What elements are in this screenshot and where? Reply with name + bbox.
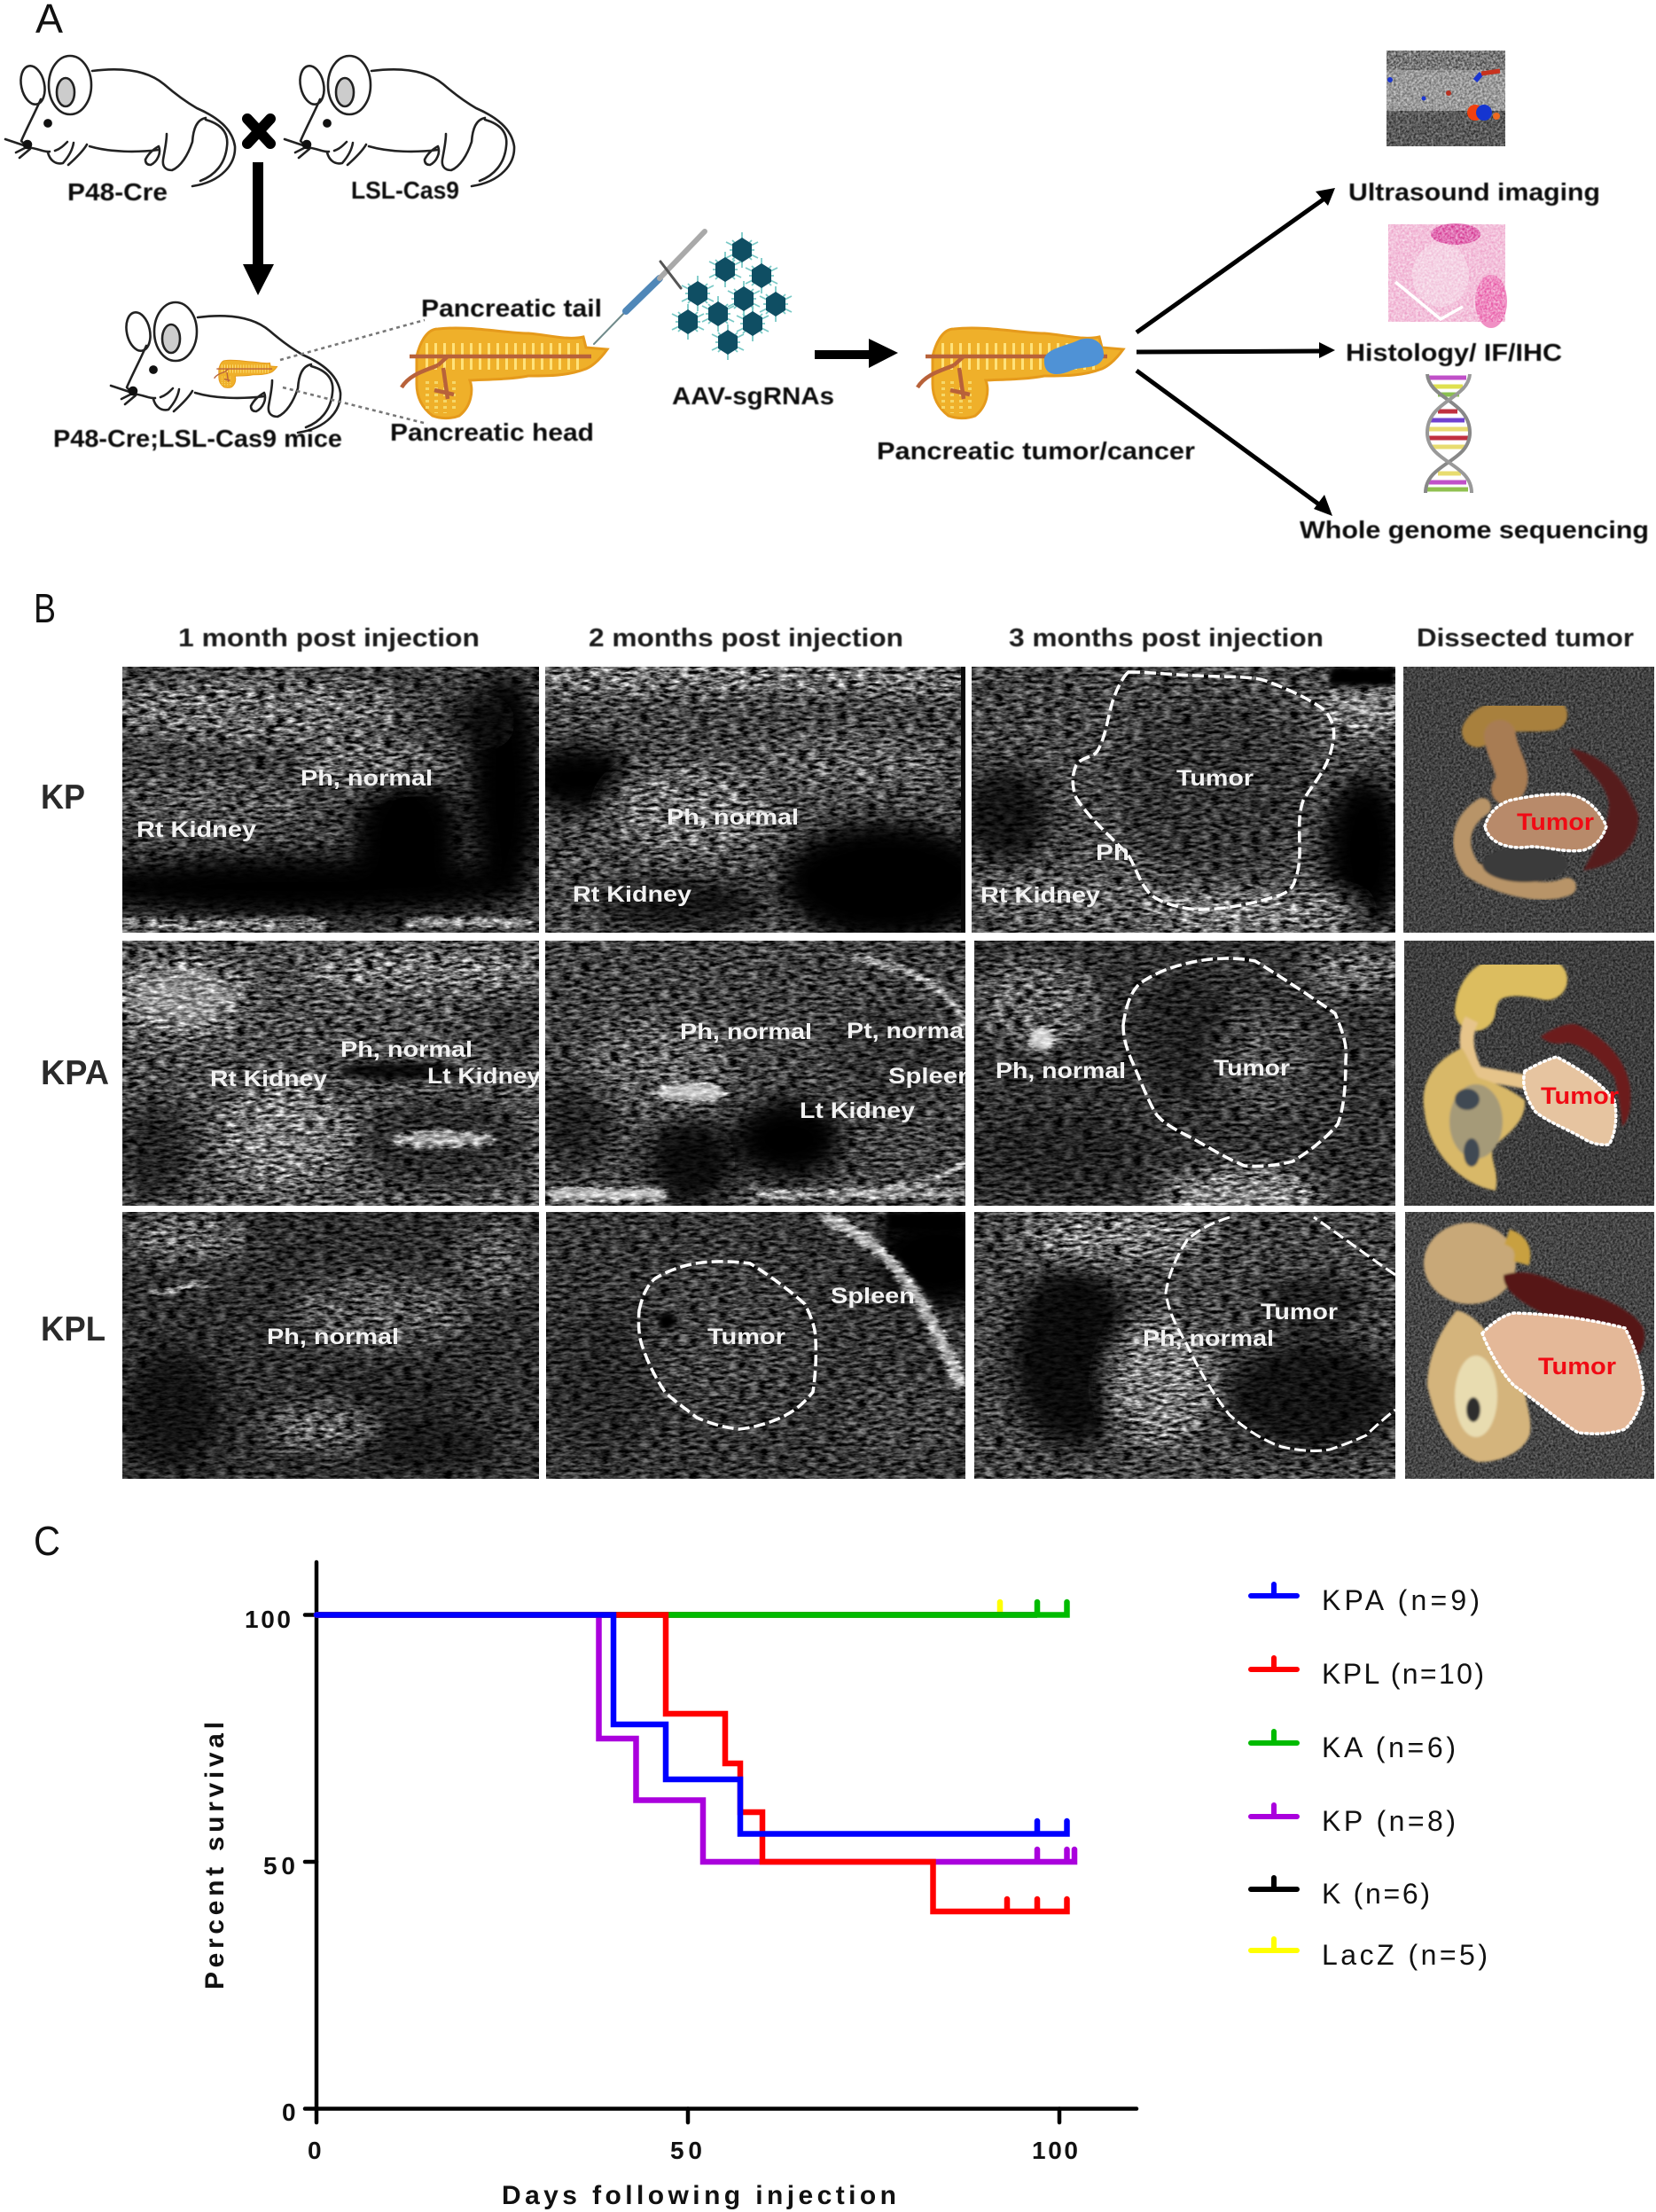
icon: P48-Cre mouse [5,56,235,186]
survival curve: K [316,1612,1037,1618]
legend item: KPA: KPA (n=9) [1322,1584,1480,1616]
icon: syringe [594,231,705,344]
ultrasound: KPA 2 months: Ph, normal [680,1020,812,1044]
heading: panel letter C: C [34,1518,60,1564]
ultrasound: KPA 1 month: Rt Kidney [210,1067,327,1091]
panel C: survival chart [34,1518,1488,2210]
tumor outline [1073,672,1334,910]
ultrasound: KPA 3 months with tumor outline: Ph, normal [996,1059,1126,1083]
dissected tumor outline [1485,794,1606,851]
ultrasound: KPA 3 months with tumor outline: Tumor [1214,1056,1290,1081]
legend item: K [1251,1878,1430,1910]
ultrasound: KPA 1 month: Lt Kidney [427,1064,541,1089]
icon: AAV particles [672,232,792,360]
column heading 3: 3 months post injection [1009,624,1324,653]
ultrasound: KPA 3 months with tumor outline [974,941,1410,1223]
survival curve: KP [316,1615,1074,1862]
survival curve: KA [316,1602,1067,1615]
ultrasound: KP 2 months [545,667,965,933]
ultrasound: KPL 3 months with tumor outline [974,1212,1401,1479]
heading: panel letter B: B [34,585,56,631]
survival curve: KPL [316,1615,1067,1911]
arrow: AAV to tumor [815,339,898,368]
ultrasound: KPL 2 months with tumor outline: Spleen [831,1284,915,1309]
x-axis title: Days following injection [502,2181,896,2210]
label: whole genome sequencing: Whole genome sequencing [1300,516,1649,543]
label: pancreatic tumor/cancer: Pancreatic tumor/cancer [877,437,1195,465]
ultrasound: KPA 2 months: Pt, normal [847,1019,971,1043]
photo: KPA dissected tumor: Tumor [1541,1083,1620,1109]
photo: KP dissected tumor [1403,667,1654,933]
ultrasound: KPA 1 month [115,941,559,1206]
icon: cross symbol [247,119,270,144]
ultrasound: KPA 2 months: Lt Kidney [800,1098,915,1123]
image: ultrasound doppler thumbnail [1387,51,1505,146]
y-axis tick labels: 50 [263,1852,295,1880]
legend item: KP [1251,1805,1456,1837]
arrow: cross to offspring [243,162,274,295]
x-axis tick labels: 0 [308,2137,322,2164]
column heading 4: Dissected tumor [1417,624,1634,653]
y-axis title: Percent survival [200,1722,230,1989]
icon: DNA helix [1426,374,1472,493]
label: AAV-sgRNAs: AAV-sgRNAs [672,382,834,410]
legend item: LacZ: LacZ (n=5) [1322,1939,1488,1971]
x-axis tick labels: 100 [1032,2137,1078,2164]
ultrasound: KPL 2 months with tumor outline [546,1210,1006,1479]
icon: pancreas with tumor [918,328,1123,418]
ultrasound: KPL 1 month [122,1212,539,1479]
ultrasound: KP 1 month [122,667,539,933]
dissected tumor outline [1482,1313,1644,1434]
legend item: KP: KP (n=8) [1322,1805,1456,1837]
icon: offspring mouse with pancreas [111,302,340,433]
panel A: experimental schematic [5,0,1649,543]
ultrasound: KPL 3 months with tumor outline: Tumor [1261,1300,1338,1325]
ultrasound: KPA 2 months [541,941,973,1206]
ultrasound: KPL 3 months with tumor outline: Ph, normal [1143,1326,1274,1351]
label: P48-Cre: P48-Cre [67,178,168,206]
x-axis tick labels [308,2137,1078,2164]
row label KPA: KPA [41,1054,109,1092]
ultrasound: KP 3 months with tumor outline: Ph [1096,840,1129,865]
legend item: KPL [1251,1658,1484,1690]
ultrasound: KP 2 months: Ph, normal [667,805,799,830]
photo: KPL dissected tumor [1405,1212,1654,1479]
label: pancreatic head: Pancreatic head [390,418,594,446]
legend item: K: K (n=6) [1322,1878,1430,1910]
ultrasound: KPL 1 month: Ph, normal [267,1325,399,1349]
row label KP: KP [41,778,85,817]
survival curve: LacZ [316,1602,1000,1615]
image: histology thumbnail [1388,223,1507,328]
legend [1251,1584,1488,1971]
arrow: to histology [1137,342,1335,358]
ultrasound: KP 3 months with tumor outline: Rt Kidney [980,883,1100,908]
label: LSL-Cas9: LSL-Cas9 [351,176,459,204]
ultrasound: KP 3 months with tumor outline [962,667,1410,933]
row label KPL: KPL [41,1310,105,1348]
photo: KPL dissected tumor: Tumor [1538,1353,1617,1380]
ultrasound: KP 1 month: Rt Kidney [137,817,256,842]
y-axis tick labels: 0 [282,2099,296,2126]
arrow: to sequencing [1137,371,1332,516]
legend item: KPA [1251,1584,1480,1616]
ultrasound: KPL 2 months with tumor outline: Tumor [707,1325,785,1349]
label: histology: Histology/ IF/IHC [1346,339,1562,366]
axes [305,1562,1137,2122]
label: ultrasound imaging: Ultrasound imaging [1348,178,1600,206]
ultrasound: KPA 2 months: Spleen [888,1064,973,1089]
photo: KPA dissected tumor [1404,941,1654,1206]
label: pancreatic tail: Pancreatic tail [421,294,602,322]
tumor outline [638,1262,816,1429]
survival curve: KPA [316,1615,1067,1833]
ultrasound: KP 1 month: Ph, normal [301,766,433,791]
column heading 2: 2 months post injection [589,624,903,653]
column heading 1: 1 month post injection [178,624,480,653]
legend item: KA: KA (n=6) [1322,1731,1456,1763]
y-axis tick labels: 100 [245,1606,291,1633]
dissected tumor outline [1524,1057,1616,1145]
label: offspring genotype: P48-Cre;LSL-Cas9 mice [53,425,342,452]
y-axis tick labels [245,1606,296,2126]
arrow: to ultrasound [1137,188,1335,332]
dotted lines from mouse to pancreas [280,320,427,424]
tumor outline [1166,1217,1395,1450]
icon: large pancreas [402,328,607,418]
ultrasound: KP 3 months with tumor outline: Tumor [1176,766,1254,791]
icon: LSL-Cas9 mouse [285,56,514,186]
panel B: ultrasound time course [34,585,1654,1479]
photo: KP dissected tumor: Tumor [1517,809,1595,835]
x-axis tick labels: 50 [670,2137,702,2164]
tumor outline [1123,958,1346,1166]
ultrasound: KP 2 months: Rt Kidney [573,882,691,907]
legend item: KPL: KPL (n=10) [1322,1658,1484,1690]
legend item: KA [1251,1731,1456,1763]
ultrasound: KPA 1 month: Ph, normal [340,1037,473,1062]
